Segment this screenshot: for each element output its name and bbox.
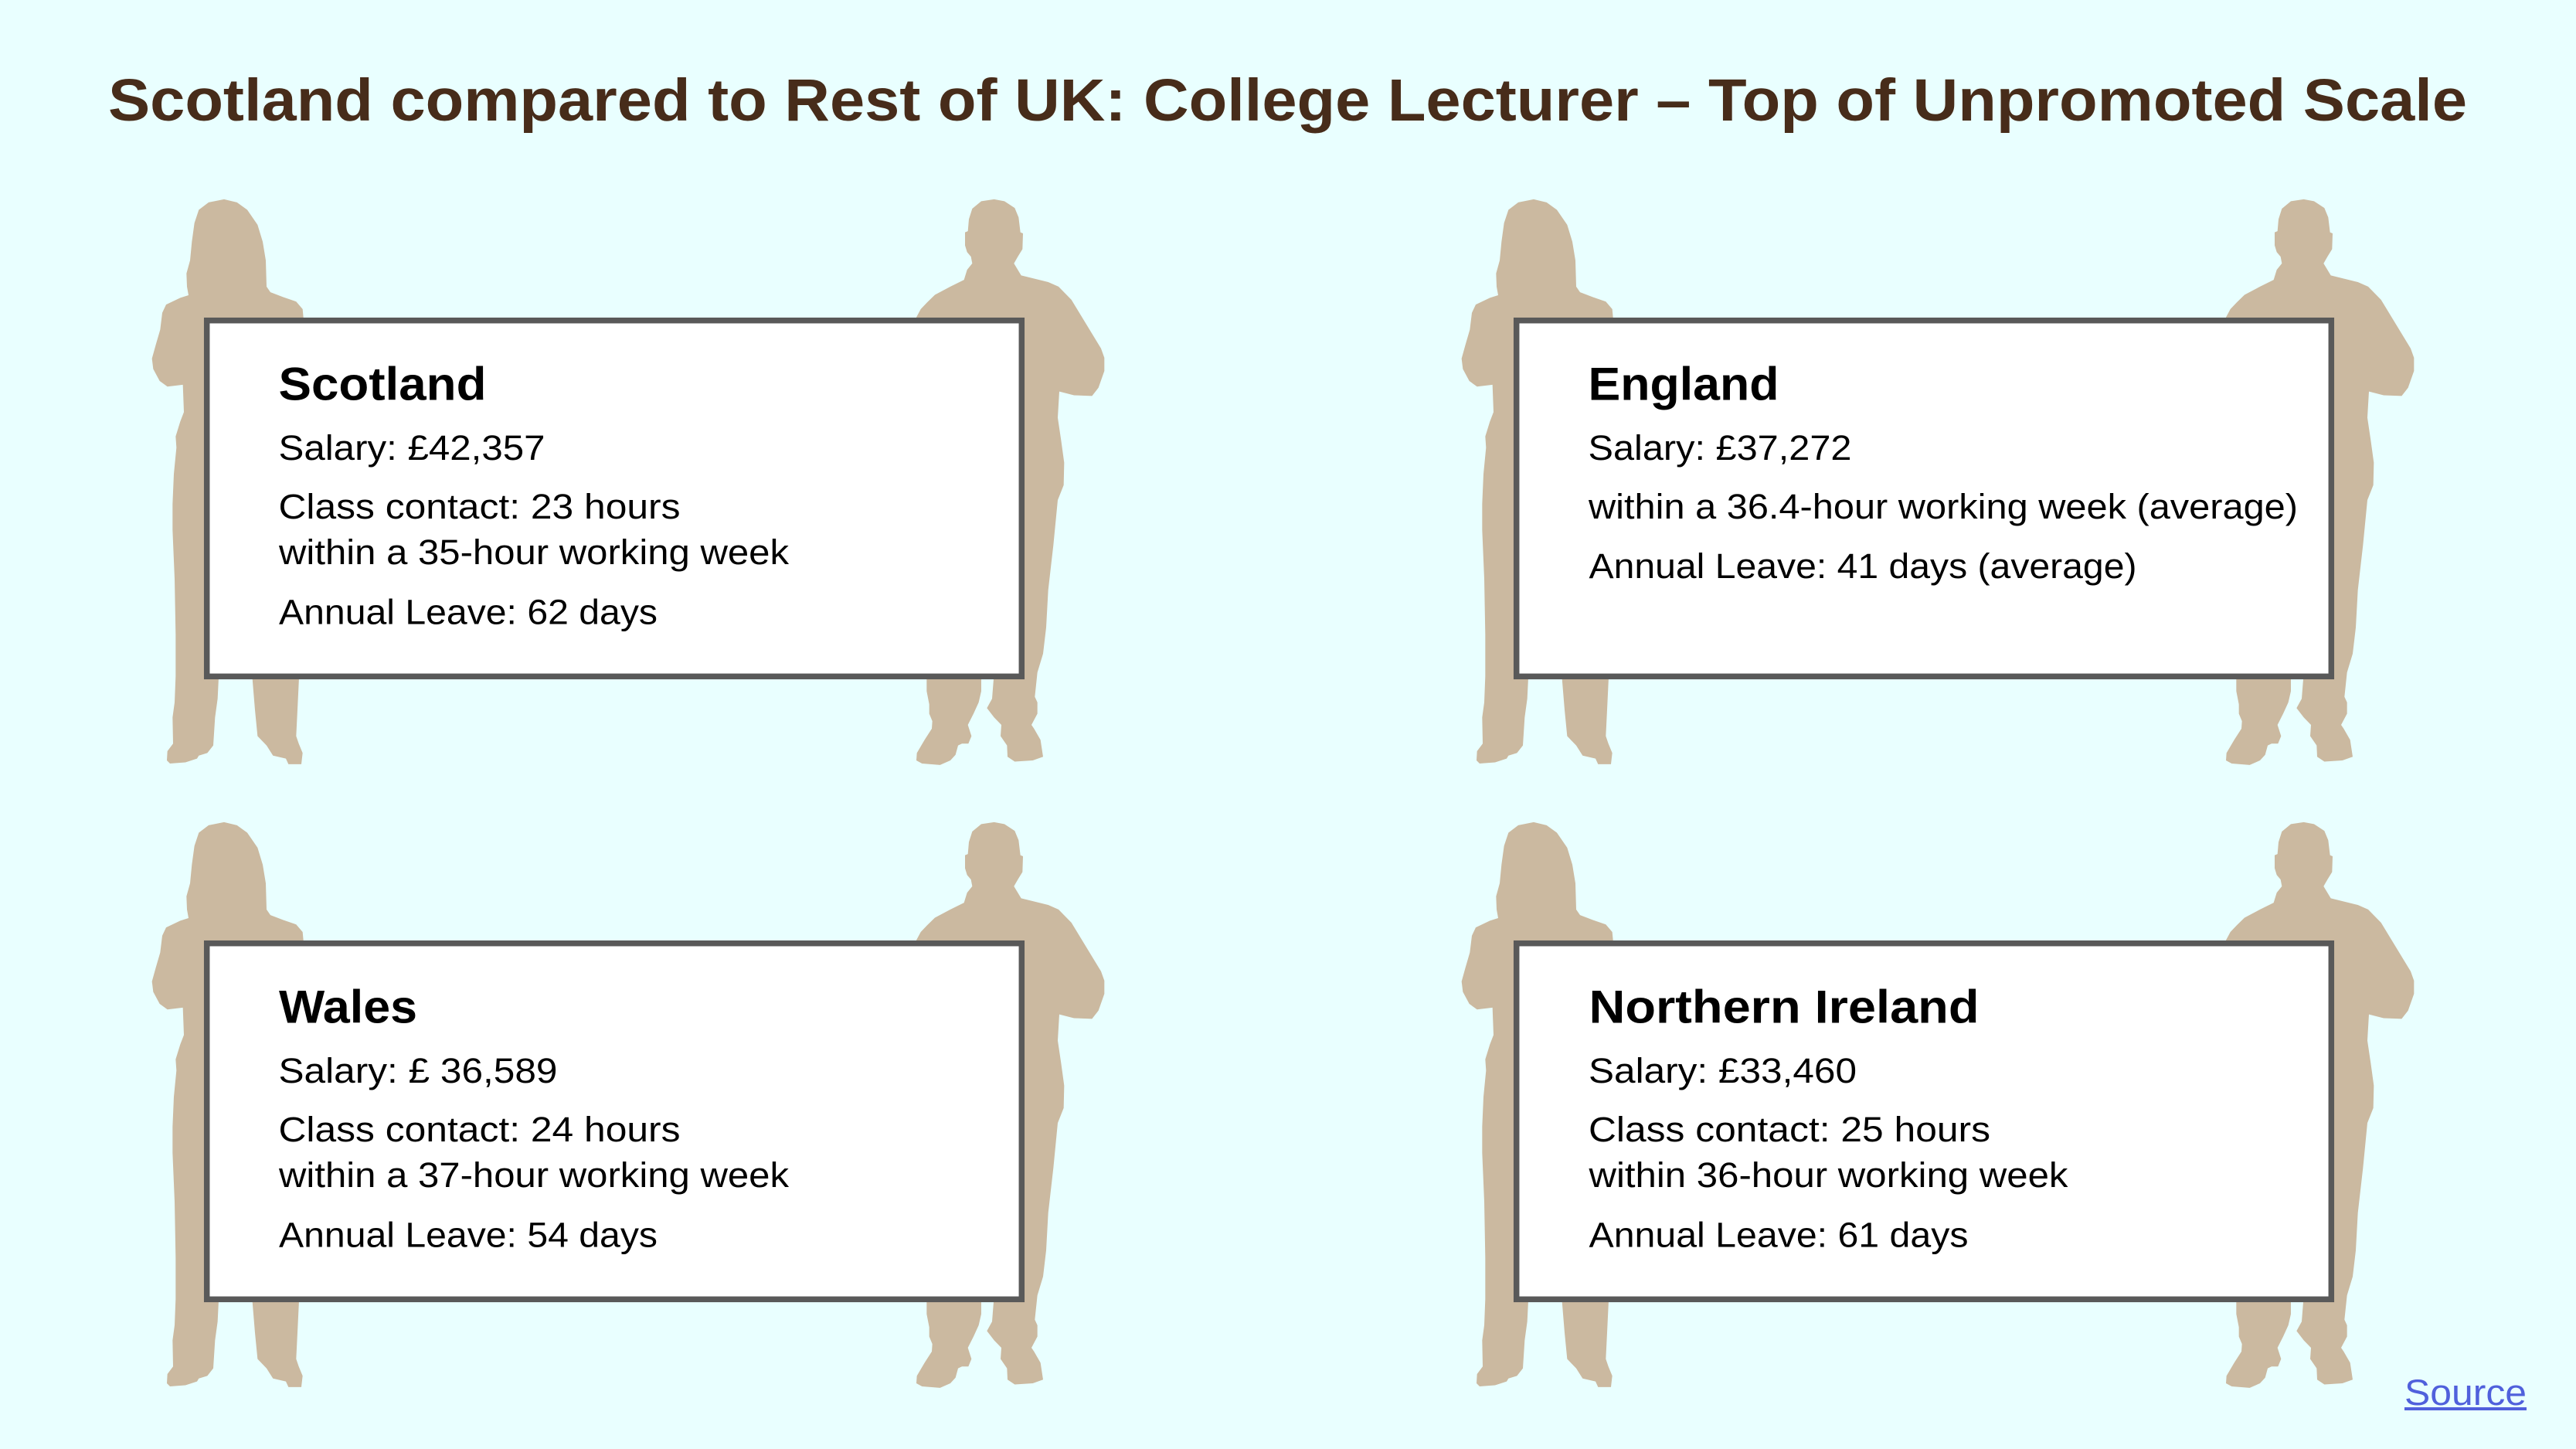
panel: Northern Ireland <box>1462 822 2414 1388</box>
panel: Scotland <box>152 199 1104 765</box>
silhouette: man <box>2226 199 2414 765</box>
salary: Salary: £ 36,589 <box>278 1051 558 1090</box>
working week: within a 36.4-hour working week (average) <box>1588 487 2298 526</box>
annual leave: Annual Leave: 61 days <box>1589 1215 1969 1255</box>
working week: within 36-hour working week <box>1588 1155 2068 1195</box>
heading: England: England <box>1589 359 1779 410</box>
sign board <box>1517 321 2331 676</box>
salary: Salary: £37,272 <box>1589 428 1851 468</box>
annual leave: Annual Leave: 41 days (average) <box>1589 546 2137 586</box>
panel: England <box>1462 199 2414 765</box>
silhouette: woman <box>1462 822 1613 1387</box>
silhouette: man <box>916 822 1104 1388</box>
sign board <box>207 321 1021 676</box>
annual leave: Annual Leave: 54 days <box>279 1215 658 1255</box>
heading: Scotland: Scotland <box>278 359 487 410</box>
working week: within a 35-hour working week <box>278 532 789 572</box>
class contact: Class contact: 25 hours <box>1589 1110 1990 1149</box>
heading: Wales: Wales <box>279 981 417 1032</box>
silhouette: man <box>2226 822 2414 1388</box>
silhouette: man <box>916 199 1104 765</box>
silhouette: woman <box>1462 199 1613 764</box>
salary: Salary: £33,460 <box>1589 1051 1857 1090</box>
class contact: Class contact: 24 hours <box>278 1110 680 1149</box>
silhouette: woman <box>152 822 304 1387</box>
salary: Salary: £42,357 <box>278 428 545 468</box>
sign board <box>1517 944 2331 1299</box>
sign board <box>207 944 1021 1299</box>
title: Scotland compared to Rest of UK: College Lecturer – Top of Unpromoted Scale <box>108 67 2467 134</box>
panel: Wales <box>152 822 1104 1388</box>
class contact: Class contact: 23 hours <box>278 487 680 526</box>
silhouette: woman <box>152 199 304 764</box>
source link: Source <box>2404 1372 2527 1413</box>
working week: within a 37-hour working week <box>278 1155 789 1195</box>
heading: Northern Ireland: Northern Ireland <box>1589 981 1980 1032</box>
annual leave: Annual Leave: 62 days <box>279 592 658 632</box>
